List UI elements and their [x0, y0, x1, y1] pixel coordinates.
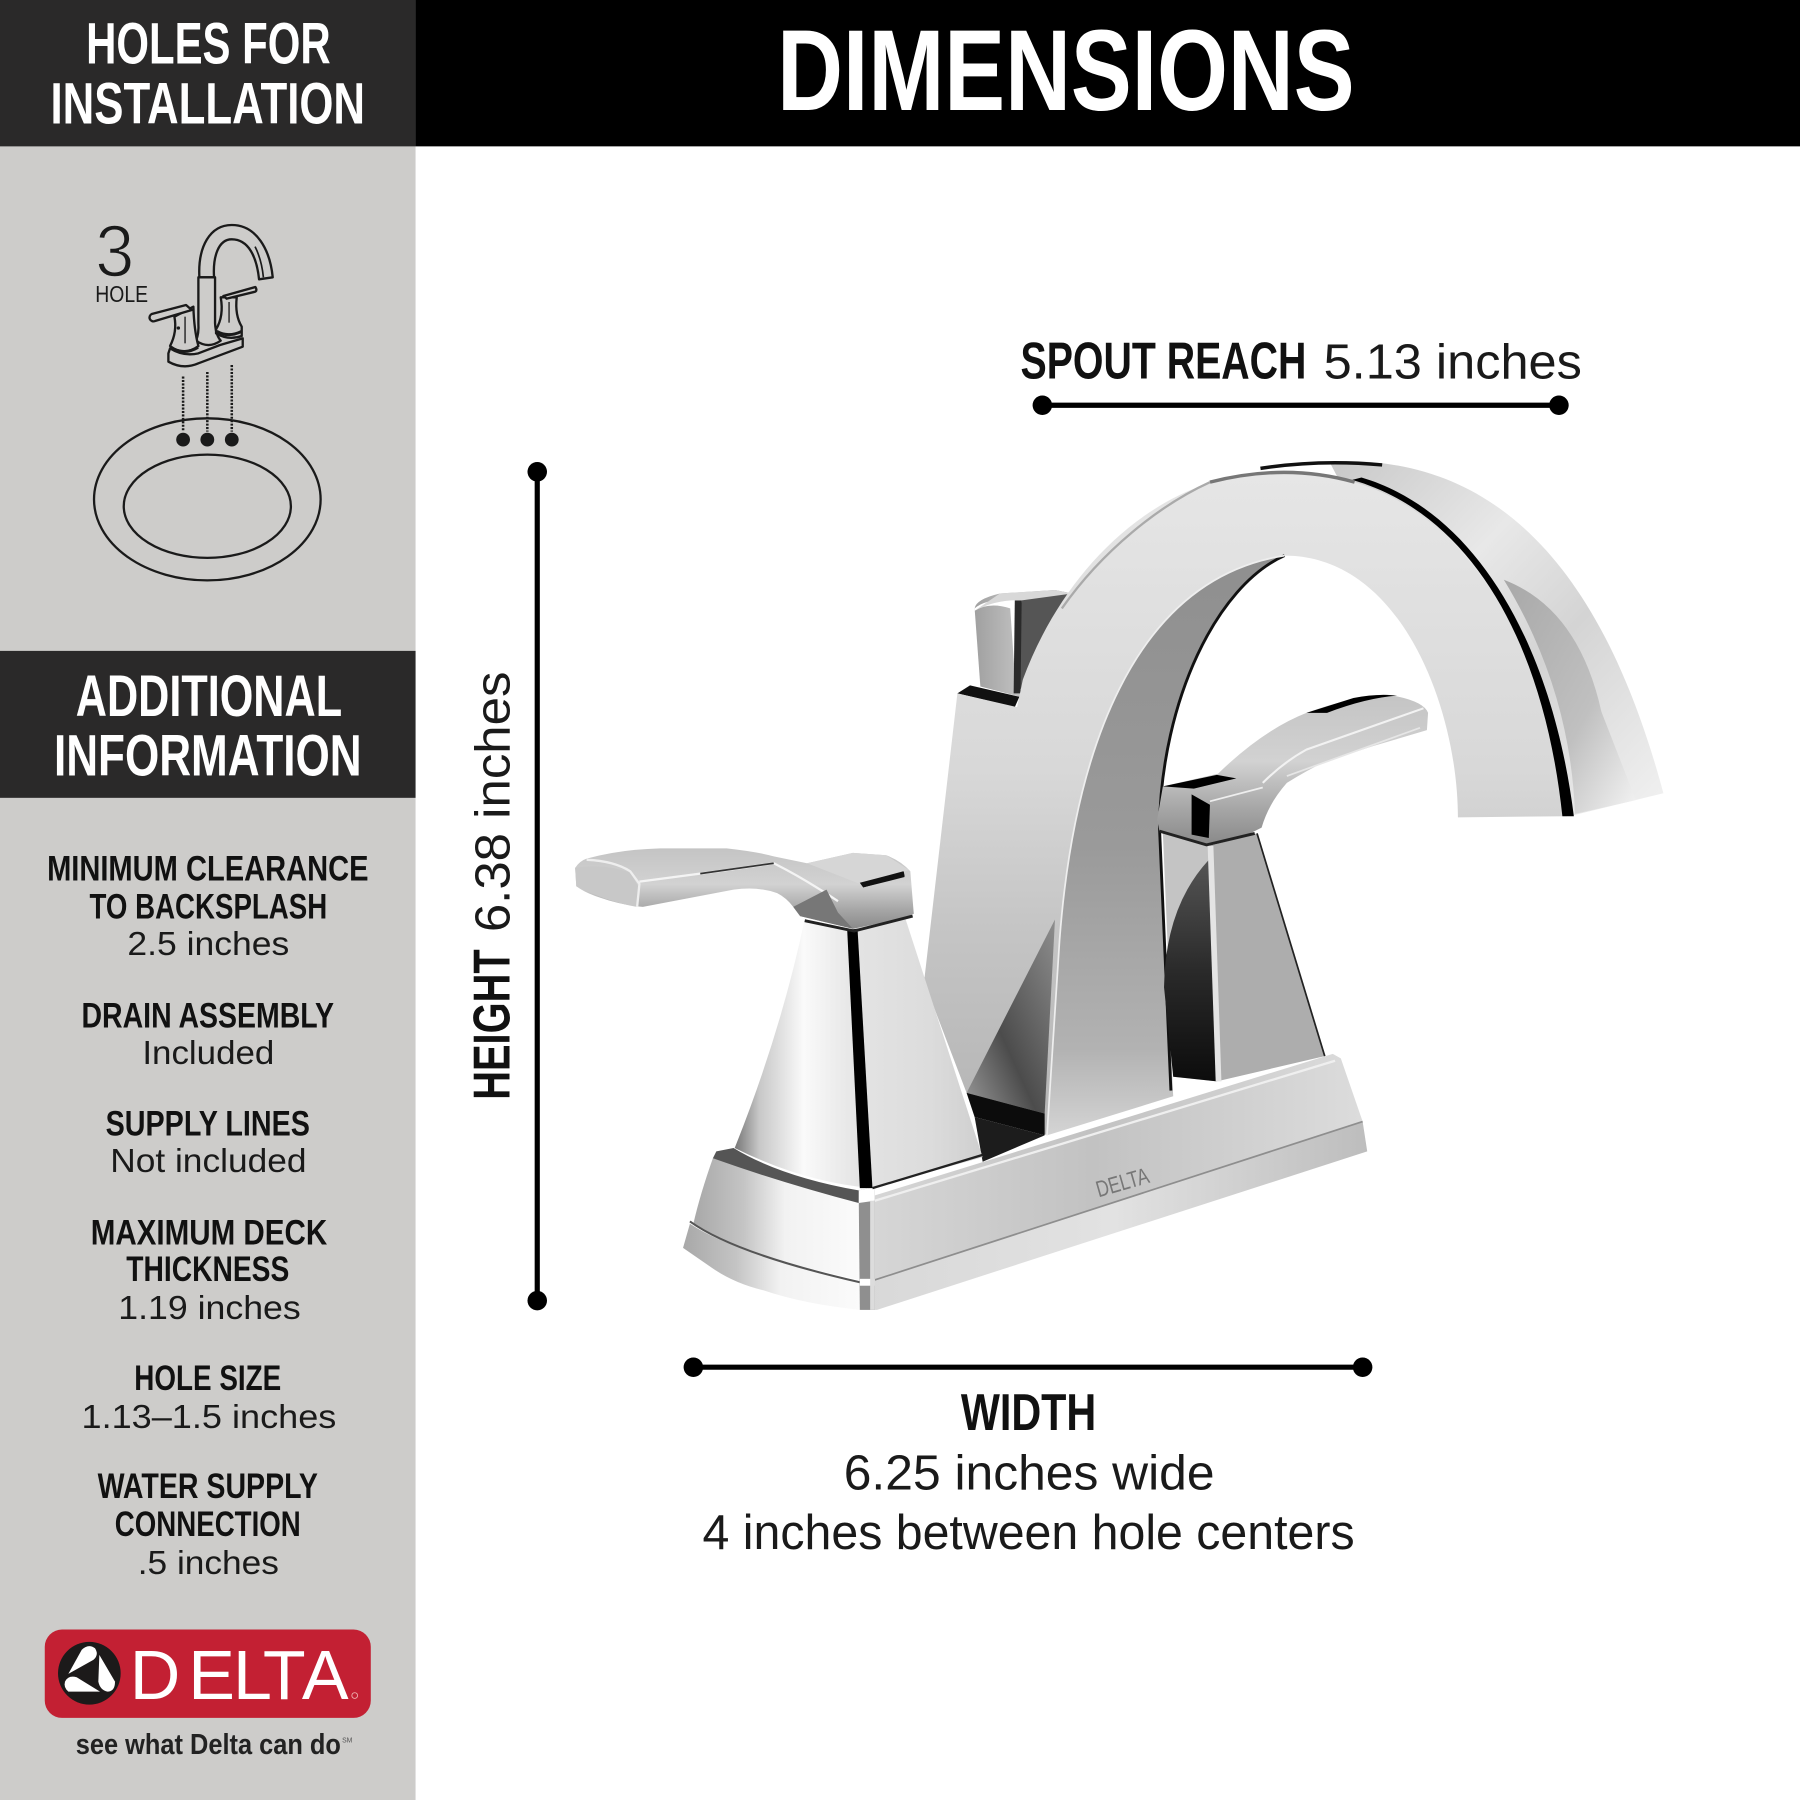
text block: maximum deck thickness: 1.19 inches	[118, 1290, 301, 1327]
logo: delta	[45, 1630, 371, 1718]
text block: maximum deck thickness: THICKNESS	[126, 1249, 289, 1289]
panel: sidebar background	[0, 0, 416, 1800]
faucet: spout side reflection	[1504, 580, 1636, 814]
dimension line: height	[527, 462, 547, 1310]
text block: minimum clearance: 2.5 inches	[127, 926, 289, 963]
text block: water supply connection: CONNECTION	[115, 1504, 301, 1544]
faucet: spout inner shadow panel	[1047, 556, 1285, 1135]
text block: water supply connection: WATER SUPPLY	[98, 1466, 318, 1506]
faucet: base back top	[975, 1117, 1045, 1162]
label: spout reach	[1021, 331, 1582, 389]
header: additional information	[0, 651, 416, 798]
text block: hole size: HOLE SIZE	[134, 1358, 281, 1398]
text block: hole size: 1.13–1.5 inches	[82, 1399, 336, 1436]
faucet: body lower dark wedge	[967, 920, 1055, 1114]
header: holes for installation: INSTALLATION	[51, 71, 365, 136]
header: additional information: ADDITIONAL	[76, 664, 342, 729]
text block: minimum clearance: MINIMUM CLEARANCE	[47, 848, 368, 888]
icon: sink basin	[94, 418, 321, 580]
text block: minimum clearance	[47, 848, 368, 963]
logo: delta: DELTA	[130, 1636, 349, 1714]
text block: minimum clearance: TO BACKSPLASH	[90, 886, 327, 926]
icon label: 3 hole	[95, 210, 148, 307]
text block: water supply connection: .5 inches	[138, 1545, 279, 1582]
faucet: panel outer light edge	[1047, 556, 1285, 1135]
header: holes for installation	[0, 0, 416, 146]
label: height	[463, 672, 521, 1100]
label: height: 6.38 inches	[466, 672, 521, 932]
text block: drain assembly	[82, 995, 334, 1072]
faucet: right handle cone	[1163, 833, 1325, 1081]
text block: supply lines: SUPPLY LINES	[106, 1103, 310, 1143]
icon label: 3 hole: 3	[95, 210, 134, 293]
text block: hole size	[82, 1358, 336, 1436]
dimension line: width	[684, 1357, 1372, 1377]
text block: supply lines	[106, 1103, 310, 1180]
tagline: see what delta can do: see what Delta can do	[76, 1729, 341, 1761]
text block: drain assembly: DRAIN ASSEMBLY	[82, 995, 334, 1035]
faucet: body black shadow	[967, 1093, 1045, 1135]
header: additional information: INFORMATION	[54, 723, 362, 788]
faucet: base brand mark: DELTA	[1093, 1162, 1152, 1202]
label: width	[703, 1383, 1355, 1560]
title: dimensions: DIMENSIONS	[777, 7, 1355, 135]
faucet: spout and body front face	[924, 471, 1567, 1135]
header: holes for installation: HOLES FOR	[86, 12, 331, 77]
label: width: WIDTH	[961, 1383, 1096, 1441]
logo icon: delta mark	[58, 1642, 121, 1705]
text block: maximum deck thickness: MAXIMUM DECK	[91, 1212, 327, 1252]
label: spout reach: 5.13 inches	[1324, 334, 1582, 389]
text block: drain assembly: Included	[142, 1035, 274, 1072]
dimension line: spout reach	[1033, 395, 1569, 415]
title: dimensions	[416, 0, 1800, 146]
faucet: black spout reflection stripe	[1352, 478, 1574, 816]
icon: three hole faucet and sink	[94, 210, 321, 580]
icon: dotted drop lines	[183, 365, 232, 432]
faucet: right lever handle	[1157, 695, 1428, 845]
faucet: spout outer side	[1329, 461, 1663, 816]
text block: water supply connection	[98, 1466, 318, 1582]
faucet: left lever handle	[575, 848, 914, 931]
text block: maximum deck thickness	[91, 1212, 327, 1327]
label: spout reach: SPOUT REACH	[1021, 331, 1306, 389]
text block: supply lines: Not included	[110, 1143, 307, 1180]
icon: mounting holes	[176, 433, 239, 447]
faucet: base left corner	[683, 1158, 875, 1310]
faucet: arch top highlights	[1062, 463, 1382, 608]
faucet: panel inner black edge	[1159, 556, 1285, 1091]
icon label: 3 hole: HOLE	[95, 281, 148, 307]
icon: faucet line art	[150, 225, 273, 366]
label: width: 6.25 inches wide	[844, 1445, 1215, 1500]
faucet: base front lower band	[861, 1122, 1367, 1310]
label: height: HEIGHT	[463, 949, 521, 1100]
faucet: top stopper	[957, 590, 1072, 707]
illustration: chrome faucet	[575, 461, 1663, 1310]
faucet: left handle cone	[713, 916, 983, 1203]
label: width: 4 inches between hole centers	[703, 1505, 1355, 1560]
faucet: base front upper band	[872, 1054, 1363, 1280]
tagline: see what delta can do: SM	[342, 1738, 353, 1745]
